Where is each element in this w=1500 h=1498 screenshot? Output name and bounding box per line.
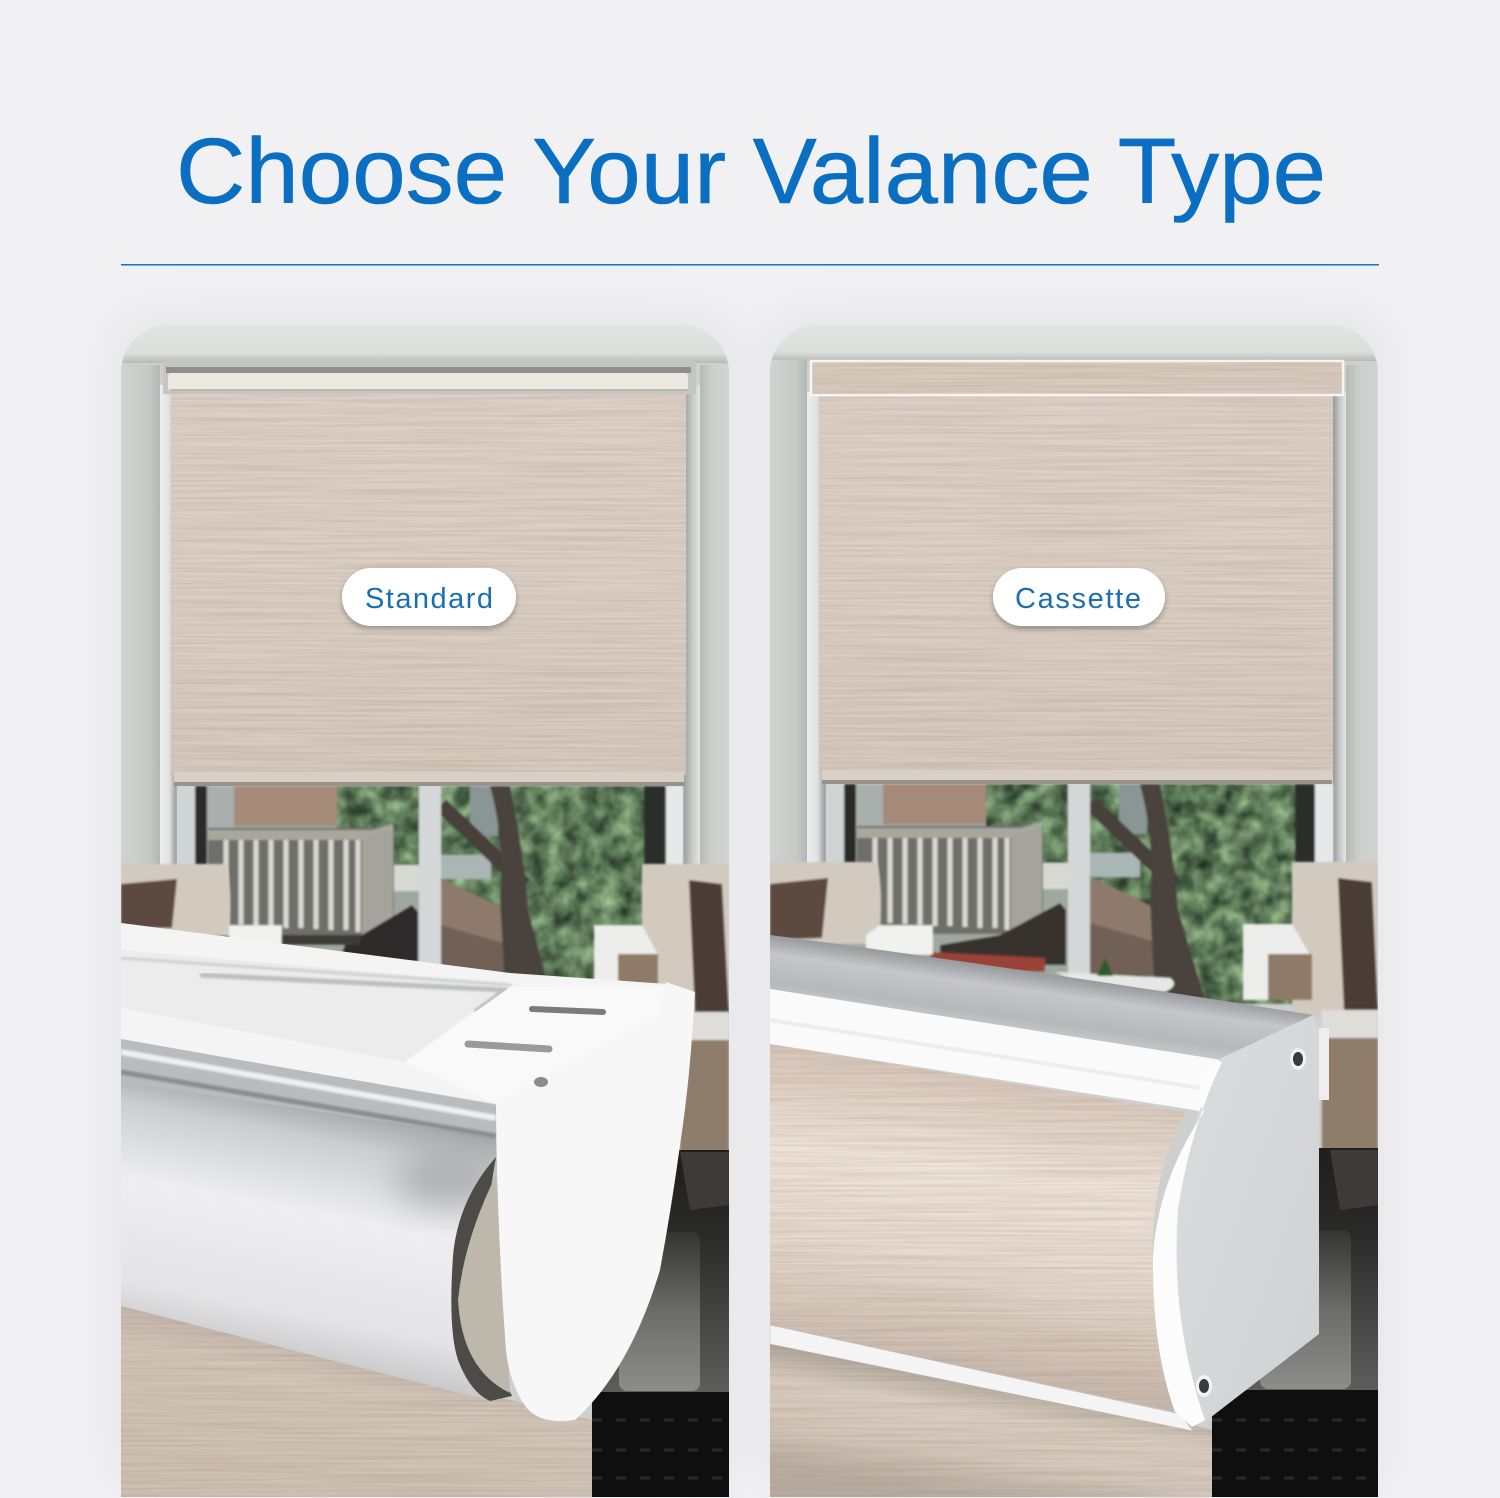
lower fabric (770, 1335, 1212, 1497)
sofas (770, 862, 1378, 1150)
headrail (163, 361, 696, 394)
fabric front (770, 1044, 1185, 1412)
zoom inset: cassette valance (770, 935, 1329, 1497)
panel: cassette (770, 325, 1378, 1497)
top grey rail (770, 935, 1313, 1062)
cassette valance (811, 361, 1343, 395)
wall bracket (1318, 1028, 1329, 1100)
screw (1196, 1375, 1212, 1397)
bottom rail (770, 1325, 1193, 1431)
zoom inset: standard bracket (121, 923, 695, 1497)
floor and table (1212, 1148, 1378, 1497)
roller (121, 1080, 512, 1401)
label pill: Standard: Standard (365, 583, 493, 615)
screw (1290, 1048, 1306, 1070)
end cap (496, 982, 695, 1421)
floor and table (592, 1150, 729, 1497)
label pill: Standard (342, 568, 516, 626)
room scene (770, 325, 1378, 1497)
panel: standard (121, 325, 729, 1497)
label pill: Cassette: Cassette (1015, 583, 1141, 615)
label pill: Cassette (993, 568, 1165, 626)
blind fabric (171, 390, 686, 786)
title: Choose Your Valance Type (176, 119, 1326, 223)
white front rail (770, 989, 1222, 1112)
window view (177, 786, 683, 1001)
top rail (121, 923, 668, 1138)
window view (826, 784, 1333, 1004)
end cap (1153, 1015, 1319, 1427)
sofas (121, 864, 729, 1153)
room scene (121, 325, 729, 1497)
blind fabric (819, 395, 1333, 784)
panel shadows (105, 305, 1395, 1495)
mounting slots (468, 1009, 603, 1087)
divider (121, 264, 1379, 266)
lower fabric (121, 1305, 592, 1497)
